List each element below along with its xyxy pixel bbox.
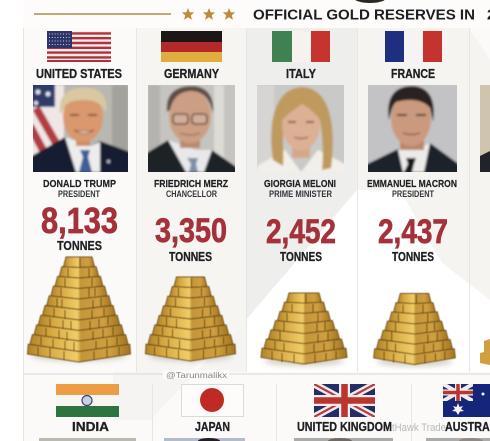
country label: ITALY [286, 66, 316, 81]
gold reserve value: 8,133 [41, 200, 118, 241]
gold bar pyramid [146, 277, 236, 361]
leader role: PRESIDENT [58, 189, 100, 199]
unit: TONNES [392, 249, 434, 264]
country label: UNITED KINGDOM [297, 419, 392, 434]
leader name: GIORGIA MELONI [264, 178, 336, 190]
panel: United States [28, 31, 130, 362]
portrait top edge [164, 438, 245, 441]
gold reserve value: 2,437 [378, 213, 448, 251]
leader role: CHANCELLOR [166, 189, 217, 199]
header rule [34, 13, 171, 15]
watermark: @Tarunmalikx [166, 371, 227, 380]
flag: United States [47, 31, 111, 62]
leader role: PRIME MINISTER [269, 189, 332, 199]
portrait: Giorgia Meloni [257, 85, 344, 172]
portrait top edge [39, 438, 136, 441]
unit: TONNES [280, 249, 322, 264]
country label: INDIA [72, 419, 110, 434]
portrait: Emmanuel Macron [368, 85, 457, 172]
country label: UNITED STATES [36, 66, 122, 81]
panel: next country cropped [480, 85, 490, 365]
country label: FRANCE [391, 66, 435, 81]
panel: Germany [145, 31, 238, 361]
gold reserve value: 3,350 [155, 212, 227, 250]
portrait fragment [480, 85, 490, 172]
panel: Japan [164, 384, 245, 441]
flag: Germany [161, 31, 222, 62]
portrait top edge [426, 438, 490, 441]
flag: Japan [182, 384, 244, 416]
watermark [163, 370, 229, 380]
flag: United Kingdom [314, 384, 375, 417]
flag: Australia [443, 384, 490, 417]
pyramid fragment [480, 339, 490, 365]
gold reserve value: 2,452 [266, 213, 336, 251]
gold bar pyramid [374, 294, 455, 366]
gold bar pyramid [28, 257, 130, 362]
portrait top edge [294, 438, 393, 441]
leader name: FRIEDRICH MERZ [154, 178, 228, 190]
portrait: Donald Trump [33, 85, 128, 172]
country label: JAPAN [195, 419, 230, 434]
leader name: DONALD TRUMP [43, 178, 116, 190]
leader name: EMMANUEL MACRON [367, 178, 457, 190]
flag: France [385, 31, 442, 62]
unit: TONNES [57, 238, 102, 253]
country label: GERMANY [164, 66, 219, 81]
panel: Australia [426, 384, 490, 441]
rating stars [182, 8, 235, 20]
emblem fragment [354, 0, 386, 3]
gold bar pyramid [261, 293, 347, 366]
flag: India [56, 384, 119, 417]
title: OFFICIAL GOLD RESERVES IN [253, 8, 475, 24]
unit: TONNES [169, 249, 212, 264]
flag: Italy [272, 31, 330, 62]
panel: United Kingdom [294, 384, 393, 441]
leader role: PRESIDENT [392, 189, 434, 199]
portrait: Friedrich Merz [148, 85, 235, 172]
panel: India [39, 384, 136, 441]
panel: France [365, 31, 460, 366]
header [34, 0, 490, 24]
panel: Italy [254, 31, 347, 366]
faint platform watermark: tHawk Trade [392, 422, 446, 434]
